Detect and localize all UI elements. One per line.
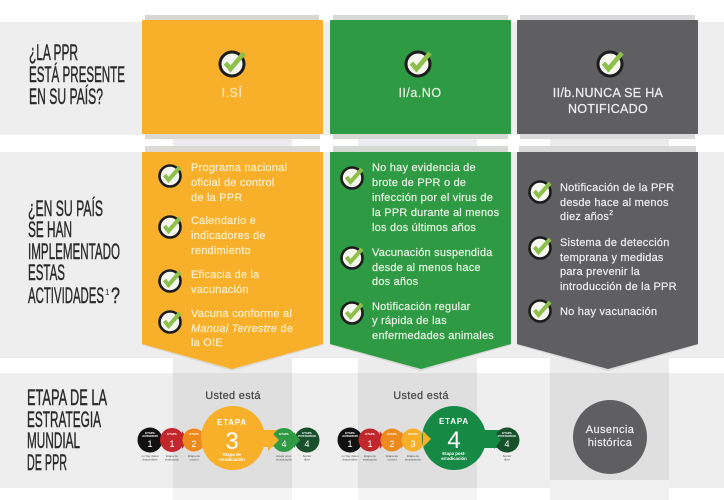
heading: etapa de la estrategia: ETAPA DE LA: [27, 385, 107, 410]
item: no hay evidencia: la PPR durante al menos: [372, 207, 500, 219]
stage diagram: etapa 4: libre: [504, 458, 510, 462]
heading: actividades: IMPLEMENTADO: [28, 239, 120, 264]
heading: la PPR presente: EN SU PAÍS?: [29, 84, 103, 109]
item: notificación: Notificación de la PPR: [560, 182, 674, 194]
heading: etapa de la estrategia: ESTRATEGIA: [27, 407, 101, 432]
item: sistema de detección: Sistema de detección: [560, 237, 670, 249]
item: calendario: rendimiento: [191, 245, 251, 257]
stage diagram: etapa 4: [338, 390, 520, 470]
stage diagram: etapa 4: ETAPA: [408, 432, 419, 436]
stage diagram: etapa 3: evaluación: [165, 458, 180, 462]
stage diagram: etapa 4: ANTERIOR: [342, 434, 359, 438]
stage diagram: etapa 3: libre: [304, 458, 310, 462]
stage diagram: etapa 4: evaluación: [363, 458, 378, 462]
stage diagram: etapa 4: Etapa de: [386, 454, 398, 458]
item: no hay evidencia: No hay evidencia de: [372, 162, 476, 174]
stage diagram: etapa 4: ETAPA: [345, 431, 356, 435]
label: II/a.NO: II/a.NO: [398, 86, 442, 100]
label: nunca notificado: II/b.NUNCA SE HA: [553, 86, 664, 100]
stage diagram: etapa 3: 2: [191, 439, 197, 449]
stage diagram: etapa 3: ETAPA: [145, 431, 156, 435]
heading: la PPR presente: ESTÁ PRESENTE: [29, 62, 125, 87]
stage diagram: etapa 4: ETAPA: [439, 417, 469, 426]
item: no hay evidencia: los dos últimos años: [372, 222, 476, 234]
callout: ausencia histórica: Ausencia: [586, 424, 635, 436]
stage diagram: etapa 3: control: [189, 458, 199, 462]
icon: check: [220, 52, 244, 76]
stage diagram: etapa 4: Sector: [503, 454, 511, 458]
stage diagram: etapa 4: Etapa de: [407, 454, 419, 458]
heading: actividades: [28, 196, 120, 308]
item: programa nacional: oficial de control: [191, 177, 274, 189]
item: sistema de detección: temprana y medidas: [560, 252, 664, 264]
item: vacuna: la OIE: [191, 337, 223, 349]
stage diagram: etapa 3: no hay datos: [141, 454, 159, 458]
item: no hay evidencia: infección por el virus de: [372, 192, 493, 204]
heading: etapa de la estrategia: DE PPR: [27, 450, 67, 475]
stage diagram: etapa 3: Sector: [303, 454, 311, 458]
label: I.SÍ: I.SÍ: [222, 85, 242, 100]
panel: actividades II/b: [517, 152, 698, 371]
item: eficacia: [160, 269, 260, 296]
item: eficacia: Eficacia de la: [191, 269, 260, 281]
stage diagram: etapa 4: disponibles: [342, 458, 358, 462]
stage diagram: etapa 4: 4: [447, 427, 461, 454]
item: vacuna: Manual Terrestre de: [191, 323, 293, 335]
stage diagram: etapa 4: ETAPA: [365, 432, 376, 436]
item: programa nacional: Programa nacional: [191, 162, 287, 174]
item: notificación: diez años: [560, 211, 609, 223]
item: no hay vacunación: [530, 300, 657, 322]
label: usted está: Usted está: [393, 390, 449, 402]
stage diagram: etapa 4: 3: [410, 439, 416, 449]
stage diagram: etapa 4: ETAPA: [502, 431, 513, 435]
panel: II/b. Nunca se ha notificado: [517, 20, 698, 134]
stage diagram: etapa 3: 3: [225, 428, 239, 455]
icon: check: [598, 52, 622, 76]
stage diagram: etapa 3: 1: [169, 439, 175, 449]
item: no hay evidencia: [342, 162, 500, 234]
heading: etapa de la estrategia: MUNDIAL: [27, 428, 80, 453]
item: sistema de detección: para prevenir la: [560, 266, 641, 278]
item: vacuna: Vacuna conforme al: [191, 308, 292, 320]
item: calendario: indicadores de: [191, 230, 266, 242]
stage diagram: etapa 3: ETAPA: [217, 418, 247, 427]
stage diagram: etapa 4: 1: [347, 439, 353, 449]
item: notificación: 2: [609, 210, 613, 217]
panel: II/a. No: [330, 20, 511, 134]
item: vacunación suspendida: desde al menos hace: [372, 262, 481, 274]
stage diagram: etapa 4: Etapa post-: [442, 451, 466, 456]
label: usted está: Usted está: [205, 390, 261, 402]
stage diagram: etapa 4: control: [387, 458, 397, 462]
item: eficacia: vacunación: [191, 284, 249, 296]
column strips: [145, 15, 696, 500]
heading: la PPR presente: [29, 40, 125, 109]
stage diagram: etapa 4: 2: [389, 439, 395, 449]
item: notificación regular: enfermedades animales: [372, 330, 494, 342]
stage diagram: etapa 4: POSTERIOR: [498, 434, 517, 438]
icon: check: [406, 52, 430, 76]
stage diagram: etapa 3: Etapa de: [166, 454, 178, 458]
stage diagram: etapa 4: erradicación: [441, 456, 467, 461]
stage diagram: etapa 4: Etapa de: [364, 454, 376, 458]
item: programa nacional: de la PPR: [191, 192, 243, 204]
stage diagram: etapa 3: 1: [147, 439, 153, 449]
item: no hay evidencia: brote de PPR o de: [372, 177, 466, 189]
label: nunca notificado: [553, 86, 664, 116]
item: sistema de detección: [530, 237, 677, 293]
item: no hay vacunación: No hay vacunación: [560, 306, 657, 318]
heading: actividades: 1: [105, 288, 110, 297]
item: vacunación suspendida: Vacunación suspendida: [372, 247, 493, 259]
stage diagram: etapa 3: Etapa post-: [276, 454, 292, 458]
stage diagram: etapa 3: erradicación: [219, 457, 245, 462]
heading: etapa de la estrategia: [27, 385, 107, 475]
label: nunca notificado: NOTIFICADO: [568, 102, 648, 116]
stage diagram: etapa 3: POSTERIOR: [298, 434, 317, 438]
heading: actividades: SE HAN: [28, 217, 72, 242]
item: calendario: [160, 215, 266, 257]
item: notificación: [530, 182, 674, 223]
item: vacunación suspendida: dos años: [372, 276, 419, 288]
item: notificación regular: [342, 301, 494, 342]
stage diagram: etapa 3: erradicación: [276, 458, 293, 462]
heading: actividades: ¿EN SU PAÍS: [28, 196, 103, 221]
stage diagram: etapa 4: erradicación: [405, 458, 422, 462]
callout: ausencia histórica: [573, 400, 647, 474]
stage diagram: etapa 3: ANTERIOR: [142, 434, 159, 438]
stage diagram: etapa 4: 4: [504, 439, 510, 449]
stage diagram: etapa 3: ETAPA: [302, 431, 313, 435]
panel: actividades II/a: [330, 152, 511, 371]
heading: la PPR presente: ¿LA PPR: [29, 40, 78, 65]
heading: actividades: ACTIVIDADES: [28, 283, 104, 308]
item: notificación: desde hace al menos: [560, 197, 669, 209]
stage diagram: etapa 3: disponibles: [142, 458, 158, 462]
item: vacunación suspendida: [342, 247, 493, 288]
stage diagram: etapa 3: 4: [304, 439, 310, 449]
panel: I. Sí: [142, 20, 323, 134]
item: programa nacional: [160, 162, 287, 204]
stage diagram: etapa 3: ETAPA: [167, 432, 178, 436]
stage diagram: etapa 3: [138, 390, 320, 470]
item: notificación regular: Notificación regular: [372, 301, 471, 313]
callout: ausencia histórica: histórica: [588, 437, 633, 449]
item: notificación regular: y rápida de las: [372, 315, 447, 327]
item: calendario: Calendario e: [191, 215, 256, 227]
stage diagram: etapa 3: Etapa de: [223, 452, 242, 457]
stage diagram: etapa 4: no hay datos: [341, 454, 359, 458]
panel: actividades I: [142, 152, 323, 371]
heading: actividades: ESTAS: [28, 260, 65, 285]
heading: actividades: ?: [111, 283, 120, 308]
item: vacuna: [160, 308, 293, 349]
stage diagram: etapa 4: ETAPA: [387, 432, 398, 436]
stage diagram: etapa 3: 4: [281, 439, 287, 449]
stage diagram: etapa 3: ETAPA: [189, 432, 200, 436]
stage diagram: etapa 3: ETAPA: [279, 432, 290, 436]
stage diagram: etapa 3: Etapa de: [188, 454, 200, 458]
stage diagram: etapa 4: 1: [367, 439, 373, 449]
item: sistema de detección: introducción de la PPR: [560, 281, 677, 293]
